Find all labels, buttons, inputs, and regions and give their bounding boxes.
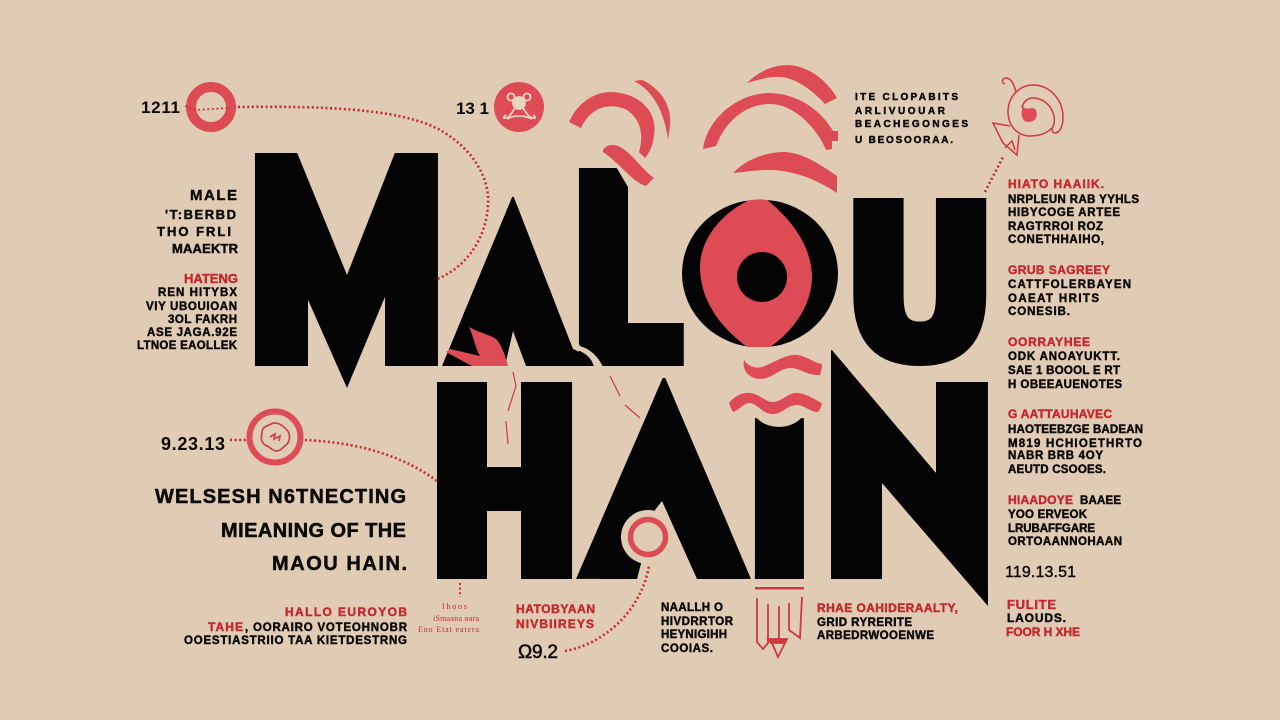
right block 1: CONETHHAIHO, <box>1008 234 1104 246</box>
bottom right caption: GRID RYRERITE <box>817 617 912 629</box>
left text: male: MAAEKTR <box>172 241 239 256</box>
bottom right caption: ARBEDRWOOENWE <box>817 630 934 642</box>
marker 1211 with ring: 1211 <box>141 98 180 117</box>
letter L: L <box>574 136 678 407</box>
bottom left caption: OOESTIASTRIIO TAA KIETDESTRNG <box>184 635 407 647</box>
left text: male <box>157 187 239 256</box>
top right text block: ARLIVUOUAR <box>855 106 946 117</box>
small red note under H <box>418 583 479 634</box>
right block 3 <box>1008 335 1122 391</box>
left text: hating: 3OL FAKRH <box>168 314 237 326</box>
right block 1: RAGTRROI ROZ <box>1008 221 1103 233</box>
right block 5: ORTOAANNOHAAN <box>1008 536 1122 548</box>
dotted connector to ring <box>565 566 649 651</box>
bottom centre caption with date: NIVBIIREYS <box>516 617 594 631</box>
bottom text block: HEYNIGIHH <box>661 629 727 641</box>
letter N: N <box>817 296 1002 672</box>
right block 1: NRPLEUN RAB YYHLS <box>1008 194 1139 206</box>
right block 5 <box>1008 493 1122 548</box>
top right text block: ITE CLOPABITS <box>855 92 958 103</box>
left text: hating <box>137 271 238 352</box>
bottom left caption: HALLO EUROYOB <box>285 605 407 619</box>
small red note under H: iSmaana oara <box>433 614 479 623</box>
bottom centre caption with date: HATOBYAAN <box>516 602 595 616</box>
marker 13 1 with icon <box>456 82 544 132</box>
right block 1: HIBYCOGE ARTEE <box>1008 207 1120 219</box>
date marker with walnut icon <box>161 412 300 462</box>
right block 4: HAOTEEBZGE BADEAN <box>1008 424 1143 436</box>
bottom text block <box>661 602 734 655</box>
right block 1: HIATO HAAIIK. <box>1008 177 1104 191</box>
dotted connector from date to H <box>305 440 437 481</box>
letter M: M <box>244 111 449 418</box>
bottom centre caption with date <box>516 602 595 663</box>
right block 5: HIAADOYE <box>1008 493 1073 507</box>
right block 6: FOOR H XHE <box>1006 625 1080 639</box>
icon: walnut <box>261 423 290 451</box>
date right: 119.13.51 <box>1005 564 1076 581</box>
red arcs above the L <box>569 80 670 186</box>
main statement <box>155 486 407 575</box>
red arcs above the O <box>703 65 838 193</box>
thin red crack lines <box>506 372 640 444</box>
right block 4: AEUTD CSOOES. <box>1008 464 1106 476</box>
letter A: A <box>585 338 743 628</box>
letter I: I <box>743 385 816 622</box>
right block 4: M819 HCHIOETHRTO <box>1008 438 1142 450</box>
marker 1211 with ring <box>141 87 231 127</box>
right block 4: G AATTAUHAVEC <box>1008 407 1112 421</box>
halo cut at foot of L <box>573 344 603 367</box>
right block 5: BAAEE <box>1080 495 1121 507</box>
icon: spiral creature <box>993 78 1063 155</box>
letter N <box>831 350 988 606</box>
left text: hating: VIY UBOUIOAN <box>146 301 237 313</box>
dotted leader from creature <box>985 157 1003 192</box>
heart <box>1022 106 1037 122</box>
eye inside the O <box>700 199 812 347</box>
bottom left caption: , OORAIRO VOTEOHNOBR <box>245 622 408 634</box>
left text: male: MALE <box>190 187 237 204</box>
right block 1 <box>1008 177 1139 246</box>
right block 4: NABR BRB 4OY <box>1008 450 1103 462</box>
right block 6: FULITE <box>1007 597 1056 612</box>
top right text block: BEACHEGONGES <box>855 119 968 130</box>
title: MALOU HAIN <box>254 153 988 606</box>
left text: hating: LTNOE EAOLLEK <box>137 340 238 352</box>
small red note under H: Eno Etat eatera <box>418 625 479 634</box>
bottom right caption <box>817 601 958 642</box>
right block 2 <box>1008 263 1131 318</box>
letter A <box>442 196 579 366</box>
icon: figure <box>504 94 535 119</box>
right block 3: H OBEEAUENOTES <box>1008 379 1122 391</box>
bottom centre caption with date: Ω9.2 <box>518 642 558 663</box>
left text: male: 'T:BERBD <box>165 207 236 222</box>
left text: male: THO FRLI <box>157 224 231 239</box>
ring on the second A <box>621 510 675 564</box>
icon: pencil <box>755 587 804 657</box>
top right text block <box>855 92 968 146</box>
right block 2: OAEAT HRITS <box>1008 293 1099 305</box>
letter U: U <box>844 167 996 404</box>
bottom text block: COOIAS. <box>661 643 713 655</box>
bottom left caption: TAHE <box>208 620 243 634</box>
left text: hating: HATENG <box>184 271 238 286</box>
date marker with walnut icon: 9.23.13 <box>161 434 225 454</box>
main statement: MIEANING OF THE <box>221 520 406 542</box>
right block 6: LAOUDS. <box>1007 611 1066 625</box>
main statement: MAOU HAIN. <box>272 553 407 575</box>
main statement: WELSESH N6TNECTING <box>155 486 406 508</box>
right block 3: SAE 1 BOOOL E RT <box>1008 365 1120 377</box>
left text: hating: ASE JAGA.92E <box>147 327 237 339</box>
bottom left caption <box>184 605 408 647</box>
marker 13 1 with icon: 13 1 <box>456 99 489 118</box>
right block 4 <box>1008 407 1143 476</box>
dotted connector from ring to M <box>238 107 488 279</box>
right block 2: CONESIB. <box>1008 306 1070 318</box>
right block 2: CATTFOLERBAYEN <box>1008 279 1131 291</box>
top right text block: U BEOSOORAA. <box>855 135 953 146</box>
letter H: H <box>430 347 580 624</box>
right block 3: OORRAYHEE <box>1008 335 1090 349</box>
red waves under the O <box>729 355 822 414</box>
small red note under H: Ihoos <box>442 602 467 611</box>
letter O: O <box>679 175 841 380</box>
right block 5: YOO ERVEOK <box>1008 509 1088 521</box>
letter A <box>576 378 751 579</box>
right block 5: LRUBAFFGARE <box>1008 523 1095 535</box>
right block 3: ODK ANOAYUKTT. <box>1008 351 1120 363</box>
right block 6 <box>1006 597 1080 639</box>
bottom text block: HIVDRRTOR <box>661 616 734 628</box>
red flame on the A <box>446 327 508 366</box>
bottom right caption: RHAE OAHIDERAALTY, <box>817 601 958 615</box>
letter A: A <box>449 164 584 408</box>
right block 2: GRUB SAGREEY <box>1008 263 1110 277</box>
left text: hating: REN HITYBX <box>158 287 237 299</box>
bottom text block: NAALLH O <box>661 602 723 614</box>
